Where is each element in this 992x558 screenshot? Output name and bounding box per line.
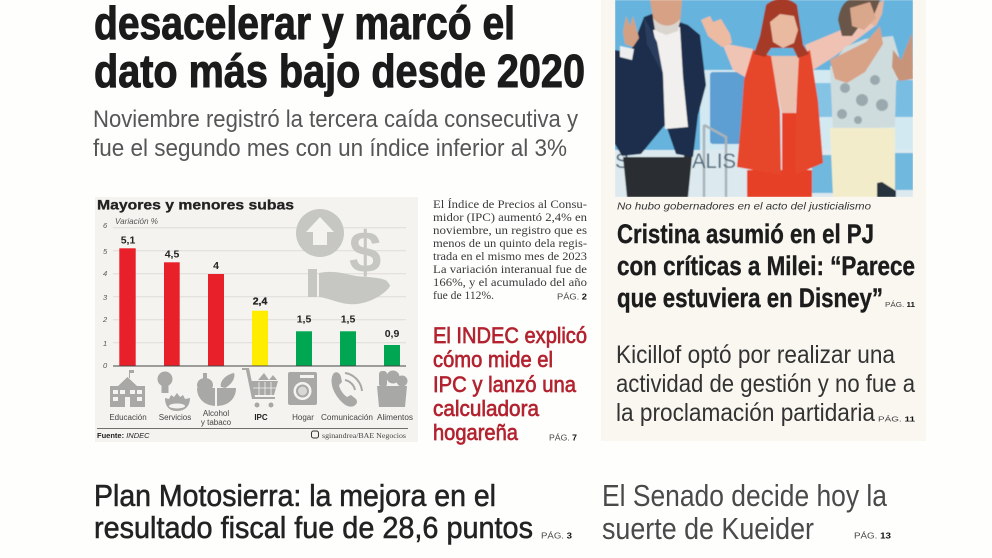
right headline: que estuviera en Disney” [617,283,883,313]
bottom right headline [602,478,888,546]
bottom right headline: suerte de Kueider [602,511,814,546]
icon: phone [332,372,362,407]
bar values: 4,5 [165,248,179,260]
bar values: 1,5 [341,314,355,326]
bar values [121,234,399,340]
red headline: cómo mide el [433,347,553,372]
category labels: IPC [254,413,268,422]
woman in floral blouse [830,0,913,197]
y axis ticks: 5 [103,247,108,256]
body text: noviembre, un registro que es [433,223,587,237]
category labels: y tabaco [201,418,232,427]
icon: food and drink [197,373,236,407]
man in suit [615,0,706,197]
secondary headline [616,341,915,427]
secondary headline: actividad de gestión y no fue a [616,370,915,398]
bar values: 1,5 [297,314,311,326]
icon: school [110,370,145,407]
body text: menos de un quinto dela regis- [433,236,587,250]
body text: trada en el mismo mes de 2023 [433,249,587,263]
grid lines [113,228,406,343]
subtitle [93,106,578,162]
category labels: Educación [109,413,147,422]
icon: shopping cart [242,368,278,408]
subtitle: Noviembre registró la tercera caída consecutiva y [93,106,578,133]
source rule [97,428,408,430]
bars [119,248,400,366]
category labels: Servicios [159,413,191,422]
body text: El Índice de Precios al Consu- [433,197,587,211]
body text: PÁG. 2 [557,292,588,302]
axis label: Variación % [115,217,158,226]
subtitle: fue el segundo mes con un índice inferior al 3% [93,135,567,162]
right headline [617,219,915,313]
page ref: PÁG. 7 [549,434,578,442]
body text: midor (IPC) aumentó 2,4% en [433,210,587,224]
photo [615,0,913,197]
icon: money hand [296,209,390,304]
page ref: PÁG. 13 [854,532,892,540]
bar values: 4 [213,260,219,272]
bar values: 5,1 [121,234,135,246]
secondary headline: la proclamación partidaria [616,399,875,427]
woman in red [701,0,884,197]
icon: washing machine [288,372,317,405]
photo: S [615,150,629,173]
red headline [433,323,587,445]
red headline: calculadora [433,396,540,421]
page ref: PÁG. 3 [541,532,573,540]
bar values: 0,9 [385,328,399,340]
y axis ticks: 4 [103,269,107,278]
body text: fue de 112%. [433,288,494,302]
y axis ticks: 3 [103,293,108,302]
icon: grocery bag [377,370,408,407]
photo: ALIS [692,150,736,173]
right headline: Cristina asumió en el PJ [617,219,874,249]
y axis ticks: 1 [103,339,107,348]
bar values: 2,4 [253,296,267,308]
panel: bar chart [95,196,418,442]
baseline [113,365,406,367]
right headline: con críticas a Milei: “Parece [617,251,915,281]
bottom left headline: Plan Motosierra: la mejora en el [94,478,496,513]
headline: dato más bajo desde 2020 [94,45,585,97]
body text: La variación interanual fue de [433,262,587,276]
red headline: El INDEC explicó [433,323,587,348]
red headline: IPC y lanzó una [433,372,577,397]
page ref: PÁG. 11 [885,300,915,309]
page ref: PÁG. 11 [878,414,915,424]
bottom right headline: El Senado decide hoy la [602,478,888,513]
panel: right column [601,0,926,441]
bottom left headline: resultado fiscal fue de 28,6 puntos [94,510,533,545]
credit: sginandrea/BAE Negocios [322,431,406,440]
body text [433,197,588,302]
category labels: Comunicación [321,413,373,422]
source: Fuente: INDEC [97,431,150,440]
icon: bulb and burner [158,372,190,411]
photo caption: No hubo gobernadores en el acto del justicialismo [617,200,871,212]
icon: money hand: $ [349,220,381,285]
body text: 166%, y el acumulado del año [433,275,587,289]
y axis ticks: 2 [102,315,108,324]
category labels: Alcohol [203,409,229,418]
y axis ticks [102,221,108,370]
category labels [109,409,413,427]
secondary headline: Kicillof optó por realizar una [616,341,895,369]
bottom left headline [94,478,533,545]
category icons [110,368,408,411]
category labels: Hogar [292,413,314,422]
category labels: Alimentos [377,413,413,422]
y axis ticks: 6 [103,221,108,230]
y axis ticks: 0 [103,361,108,370]
chart title: Mayores y menores subas [97,196,294,212]
photo backdrop [615,0,913,151]
red headline: hogareña [433,420,519,445]
headline [94,0,585,97]
